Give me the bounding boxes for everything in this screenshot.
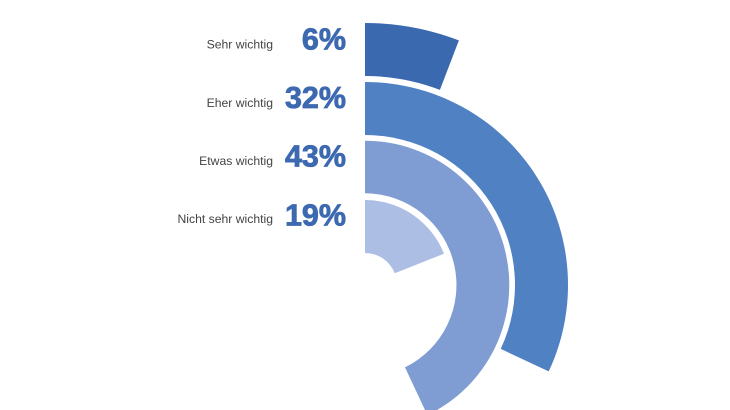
value: 19%: 19% xyxy=(285,198,346,232)
row: Etwas wichtig xyxy=(199,140,509,410)
label: Eher wichtig: Eher wichtig xyxy=(207,96,273,110)
row: Eher wichtig xyxy=(207,81,568,371)
row: Sehr wichtig xyxy=(207,22,459,90)
label: Etwas wichtig: Etwas wichtig xyxy=(199,154,273,168)
value: 43%: 43% xyxy=(285,140,346,174)
arc: 43% xyxy=(365,141,509,410)
row: Nicht sehr wichtig xyxy=(177,198,444,273)
arc: 19% xyxy=(365,200,444,273)
value: 32%: 32% xyxy=(285,81,346,115)
arc: 6% xyxy=(365,23,459,90)
value: 6%: 6% xyxy=(302,22,346,56)
label: Sehr wichtig: Sehr wichtig xyxy=(207,38,273,52)
label: Nicht sehr wichtig: Nicht sehr wichtig xyxy=(177,212,273,226)
arc: 32% xyxy=(365,82,568,371)
